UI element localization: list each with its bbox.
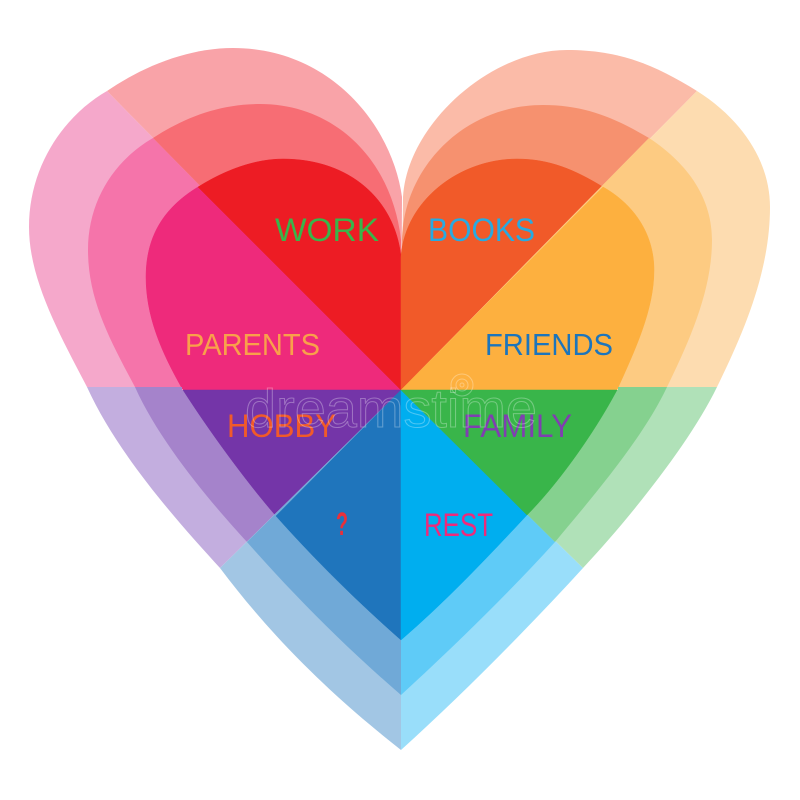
label: work: WORK	[275, 212, 379, 248]
label: family: FAMILY	[463, 408, 572, 444]
sector: family	[401, 387, 717, 568]
sector: hobby	[87, 387, 401, 568]
label: hobby: HOBBY	[227, 408, 336, 444]
sector: question mark	[220, 390, 401, 750]
watermark: dreamstime	[245, 379, 537, 439]
sector: friends	[401, 91, 770, 390]
label: question mark: ?	[336, 506, 348, 542]
sector: rest	[401, 390, 583, 750]
sector: parents	[29, 91, 401, 390]
label: parents: PARENTS	[185, 327, 320, 362]
sector: books	[401, 50, 697, 390]
sector: work	[107, 48, 402, 390]
label: rest: REST	[424, 507, 493, 543]
label: friends: FRIENDS	[485, 327, 613, 362]
label: books: BOOKS	[428, 212, 535, 248]
